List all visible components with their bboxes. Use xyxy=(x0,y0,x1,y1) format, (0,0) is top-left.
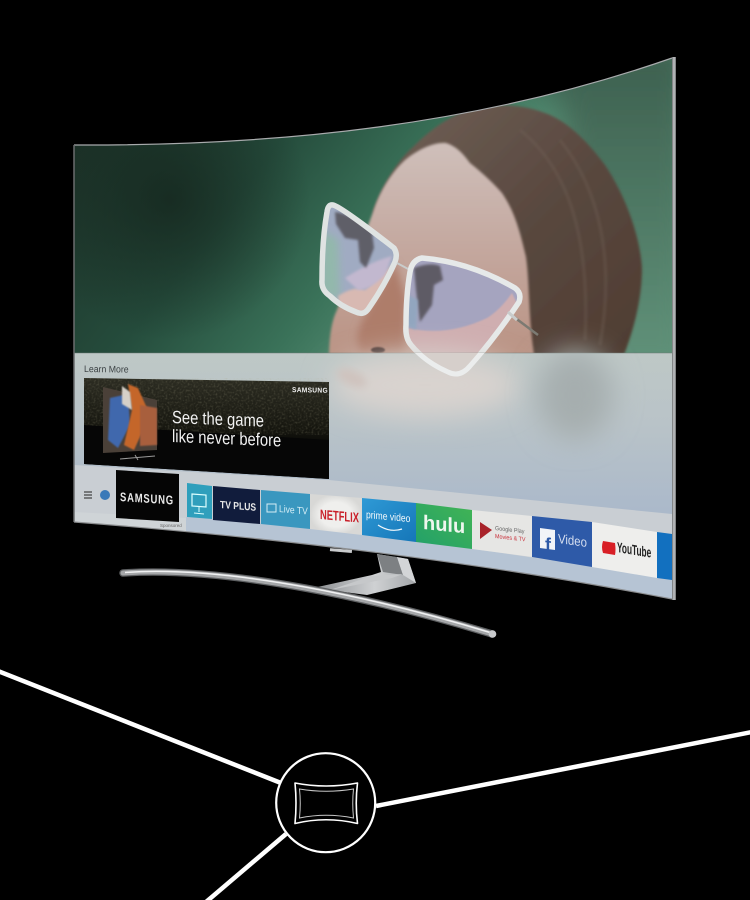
ad banner: like never before xyxy=(172,427,281,451)
green backdrop xyxy=(74,50,674,370)
TV bezel xyxy=(74,57,674,600)
tile: Hulu xyxy=(416,503,472,549)
connector lines xyxy=(0,671,750,900)
bottom reflection panel xyxy=(74,353,672,514)
portrait: hair xyxy=(373,105,642,360)
TV control button xyxy=(330,548,352,553)
sunglasses: temple arm xyxy=(510,314,538,335)
Learn More label: Learn More xyxy=(84,364,129,375)
portrait: nostril xyxy=(371,347,385,353)
reflected glasses bottom xyxy=(415,353,484,376)
backdrop right side xyxy=(540,58,672,324)
curved screen icon outer xyxy=(295,783,358,824)
ribbon left foot xyxy=(74,516,186,531)
sunglasses: left lens xyxy=(319,202,399,316)
ad: headline: See the game xyxy=(172,408,264,431)
tile: YouTube: YouTube xyxy=(617,540,651,561)
tile: Google Play xyxy=(472,510,532,557)
ribbon lower band xyxy=(186,517,672,600)
curved screen icon inner xyxy=(300,789,354,818)
portrait: face xyxy=(329,143,535,360)
globe icon xyxy=(100,490,110,500)
ad: lower dark fade xyxy=(84,425,329,479)
tile: Prime Video: prime video xyxy=(366,509,410,525)
badge circle xyxy=(276,753,375,852)
horizon shade xyxy=(74,352,672,354)
tile: Samsung sponsored xyxy=(116,470,182,528)
sunglasses: hinge xyxy=(508,312,517,320)
ad: SAMSUNG wordmark: SAMSUNG xyxy=(292,387,328,395)
tile: Prime Video xyxy=(362,498,416,542)
tile: Facebook Video: f xyxy=(545,534,552,555)
menu icon xyxy=(84,492,92,498)
portrait: nose xyxy=(357,262,406,353)
portrait: hair strands xyxy=(583,243,606,342)
tile: Samsung sponsored: SAMSUNG xyxy=(120,491,174,508)
tile: TV Plus: TV PLUS xyxy=(220,499,256,514)
tile: Facebook Video xyxy=(532,516,592,567)
reflected hair xyxy=(537,350,613,440)
tile: Google Play: Movies & TV xyxy=(495,534,526,544)
backdrop dark corner xyxy=(95,141,280,308)
tile: Live TV xyxy=(261,490,310,529)
curved screen badge xyxy=(276,753,375,852)
tile: Google Play: Google Play xyxy=(495,526,525,535)
sunglasses: right lens xyxy=(403,255,523,353)
tile: Live TV: Live TV xyxy=(279,503,309,517)
TV stand xyxy=(123,554,496,638)
tile: Netflix: NETFLIX xyxy=(320,506,359,526)
menu ribbon xyxy=(74,465,672,561)
ad: mini TV with football players xyxy=(103,384,157,460)
ad banner xyxy=(84,378,329,479)
tile: TV Plus xyxy=(213,486,260,524)
reflected skin mark xyxy=(341,370,365,386)
reflected face glow xyxy=(330,353,520,417)
sunglasses: bridge xyxy=(397,263,410,270)
tile: Netflix xyxy=(310,494,362,535)
ad: crowd texture xyxy=(84,378,329,435)
tile: partial blue xyxy=(657,532,672,580)
tile: Hulu: hulu xyxy=(423,512,465,538)
tile: Smart hub xyxy=(187,483,212,519)
tile: Facebook Video: Video xyxy=(558,531,587,550)
TV screen xyxy=(70,40,690,610)
tile: YouTube xyxy=(592,522,657,578)
tile: Samsung sponsored: Sponsored xyxy=(160,523,182,528)
